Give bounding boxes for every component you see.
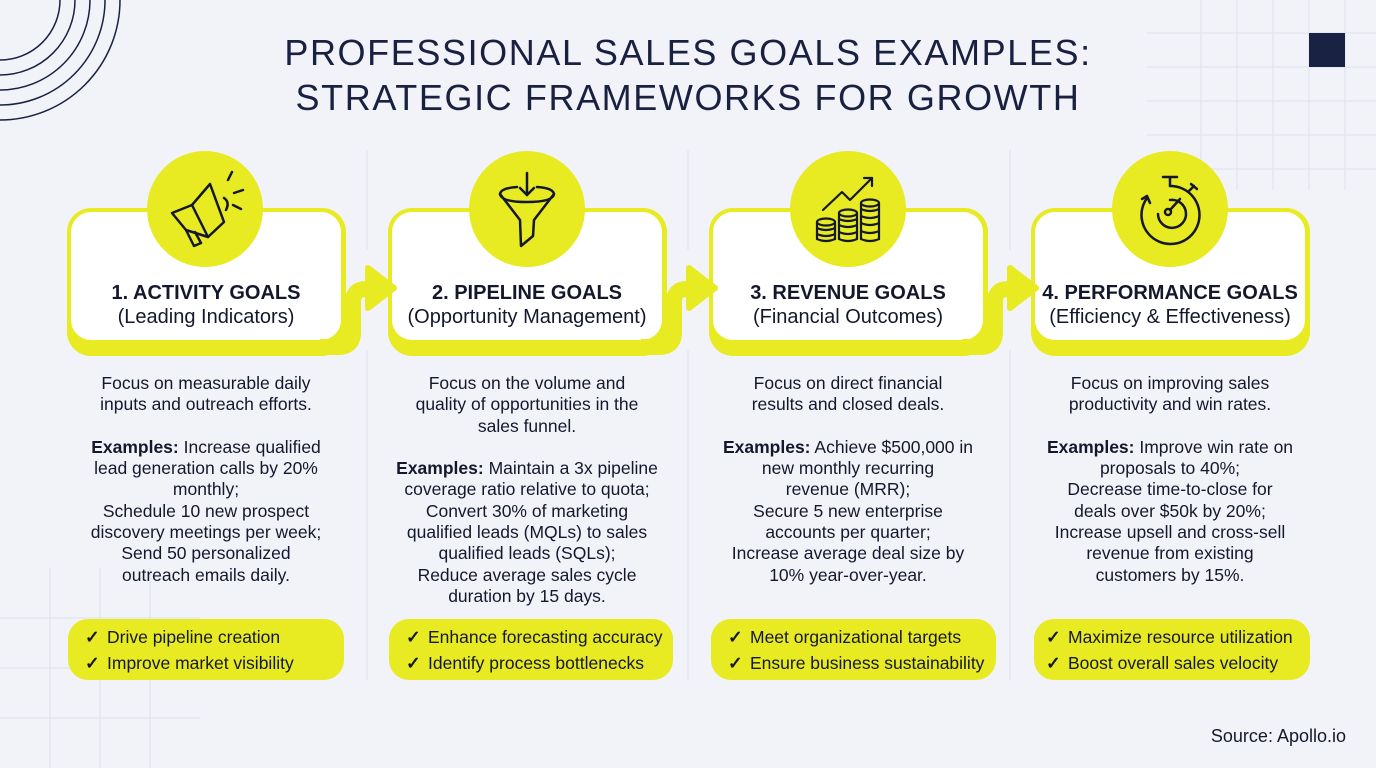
text: revenue description: Focus on direct financial <box>754 373 942 393</box>
benefits pill 3 <box>711 619 996 680</box>
icon: coins with trend <box>790 151 906 267</box>
decoration: concentric arcs <box>0 0 120 120</box>
title <box>284 32 1092 118</box>
benefits pill 3: ✓ <box>728 627 743 647</box>
card 4 title: (Efficiency & Effectiveness) <box>1049 306 1291 328</box>
text: performance description: proposals to 40%; <box>1100 458 1240 478</box>
title: STRATEGIC FRAMEWORKS FOR GROWTH <box>296 77 1080 118</box>
benefits pill 4: Maximize resource utilization <box>1068 627 1293 647</box>
benefits pill 1: Drive pipeline creation <box>107 627 280 647</box>
text: pipeline description: Examples: Maintain a 3x pipeline <box>396 458 658 478</box>
text: activity description: monthly; <box>173 479 239 499</box>
card 2 title: 2. PIPELINE GOALS <box>432 282 622 304</box>
card 3 <box>709 208 988 356</box>
card 3 title: 3. REVENUE GOALS <box>750 282 946 304</box>
text: pipeline description: Reduce average sales cycle <box>418 565 636 585</box>
text: performance description: customers by 15%. <box>1096 565 1244 585</box>
text: pipeline description <box>396 373 658 606</box>
text: pipeline description: Focus on the volume and <box>429 373 625 393</box>
text: performance description: Focus on improving sales <box>1071 373 1269 393</box>
text: revenue description <box>723 373 973 585</box>
benefits pill 3: ✓ <box>728 653 743 673</box>
card 1 title <box>112 282 300 328</box>
source: Source: Apollo.io <box>1211 726 1346 746</box>
text: performance description: deals over $50k by 20%; <box>1074 501 1266 521</box>
text: pipeline description: sales funnel. <box>478 416 576 436</box>
text: pipeline description: duration by 15 days. <box>448 586 606 606</box>
text: pipeline description: Convert 30% of marketing <box>426 501 628 521</box>
text: revenue description: Examples: Achieve $500,000 in <box>723 437 973 457</box>
text: performance description <box>1047 373 1293 585</box>
text: revenue description: revenue (MRR); <box>786 479 910 499</box>
benefits pill 2: Enhance forecasting accuracy <box>428 627 662 647</box>
benefits pill 2 <box>389 619 673 680</box>
card 2 title <box>407 282 646 328</box>
card 3 title: (Financial Outcomes) <box>753 306 943 328</box>
benefits pill 1: ✓ <box>85 627 100 647</box>
text: performance description: revenue from existing <box>1086 543 1254 563</box>
title: PROFESSIONAL SALES GOALS EXAMPLES: <box>284 32 1092 73</box>
benefits pill 3: Meet organizational targets <box>750 627 961 647</box>
text: activity description: Examples: Increase qualified <box>91 437 321 457</box>
text: activity description: Send 50 personalized <box>121 543 291 563</box>
benefits pill 1 <box>68 619 344 680</box>
icon: stopwatch <box>1112 151 1228 267</box>
card 4 title: 4. PERFORMANCE GOALS <box>1042 282 1298 304</box>
card 2 <box>388 208 667 356</box>
benefits pill 2: Identify process bottlenecks <box>428 653 644 673</box>
text: revenue description: accounts per quarter; <box>765 522 931 542</box>
arrow 2 to 3 <box>641 268 715 347</box>
card 2 title: (Opportunity Management) <box>407 306 646 328</box>
text: activity description: Schedule 10 new prospect <box>103 501 309 521</box>
benefits pill 4: ✓ <box>1046 627 1061 647</box>
text: activity description <box>91 373 321 585</box>
text: pipeline description: quality of opportunities in the <box>416 394 638 414</box>
benefits pill 2: ✓ <box>406 627 421 647</box>
icon: funnel <box>469 151 585 267</box>
benefits pill 4 <box>1034 619 1310 680</box>
text: revenue description: Increase average deal size by <box>732 543 964 563</box>
card 1 title: 1. ACTIVITY GOALS <box>112 282 300 304</box>
card 3 title <box>750 282 946 328</box>
text: activity description: inputs and outreach efforts. <box>100 394 312 414</box>
text: activity description: Focus on measurable daily <box>101 373 311 393</box>
text: performance description: Increase upsell and cross-sell <box>1055 522 1285 542</box>
text: performance description: Examples: Improve win rate on <box>1047 437 1293 457</box>
text: revenue description: Secure 5 new enterprise <box>753 501 943 521</box>
card 1 <box>67 208 346 356</box>
text: revenue description: new monthly recurring <box>762 458 934 478</box>
text: performance description: Decrease time-to-close for <box>1067 479 1273 499</box>
benefits pill 2: ✓ <box>406 653 421 673</box>
text: revenue description: results and closed deals. <box>752 394 944 414</box>
card 4 <box>1031 208 1310 356</box>
text: activity description: lead generation calls by 20% <box>94 458 318 478</box>
card 1 title: (Leading Indicators) <box>118 306 294 328</box>
benefits pill 1: Improve market visibility <box>107 653 294 673</box>
arrow 3 to 4 <box>962 268 1036 347</box>
text: pipeline description: qualified leads (SQLs); <box>438 543 616 563</box>
text: activity description: outreach emails daily. <box>122 565 290 585</box>
benefits pill 3: Ensure business sustainability <box>750 653 984 673</box>
benefits pill 1: ✓ <box>85 653 100 673</box>
text: revenue description: 10% year-over-year. <box>769 565 927 585</box>
text: activity description: discovery meetings per week; <box>91 522 321 542</box>
decoration: navy square <box>1309 33 1345 67</box>
card 4 title <box>1042 282 1298 328</box>
benefits pill 4: Boost overall sales velocity <box>1068 653 1278 673</box>
arrow 1 to 2 <box>320 268 394 347</box>
icon: megaphone <box>147 151 263 267</box>
text: pipeline description: coverage ratio relative to quota; <box>404 479 650 499</box>
benefits pill 4: ✓ <box>1046 653 1061 673</box>
text: pipeline description: qualified leads (MQLs) to sales <box>407 522 647 542</box>
text: performance description: productivity and win rates. <box>1069 394 1271 414</box>
